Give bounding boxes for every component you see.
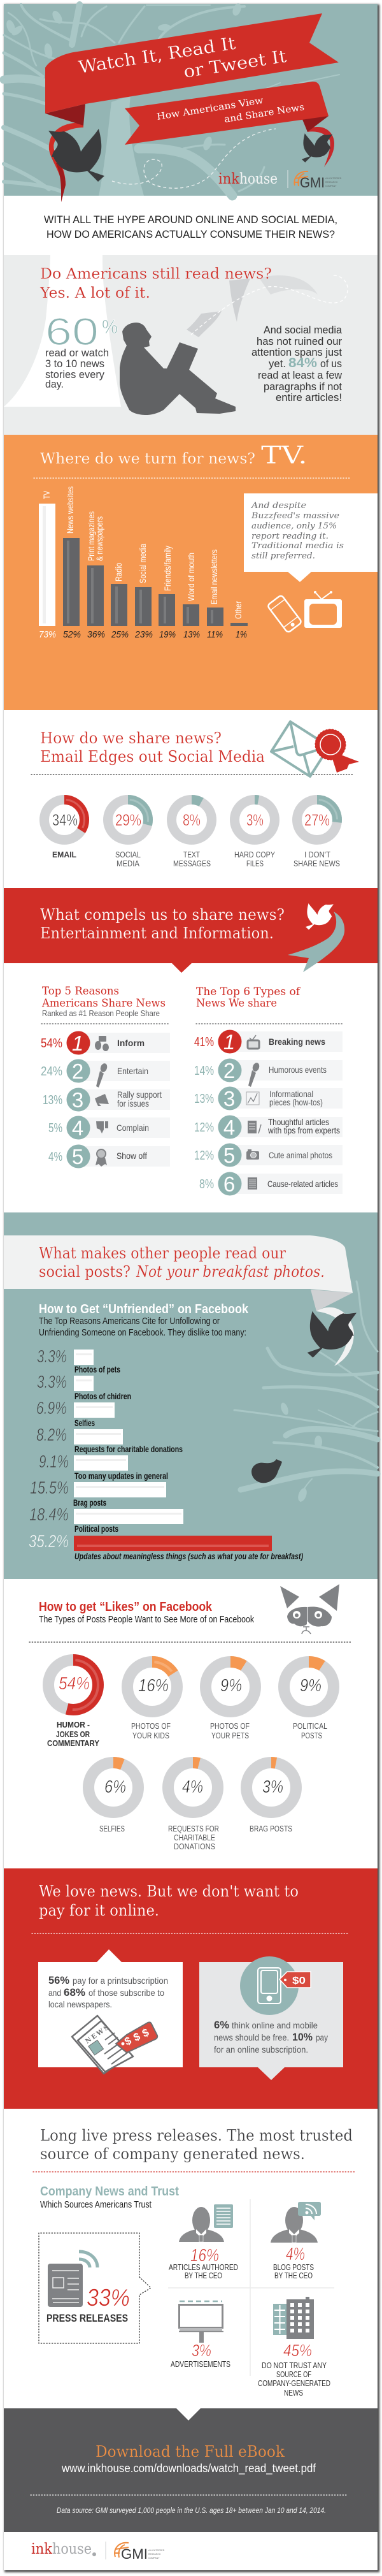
list: reasons to share: 24% (41, 1065, 62, 1079)
white trunk (4, 255, 121, 407)
bar chart: 19% (159, 629, 176, 640)
donut chart: liked posts: COMMENTARY (47, 1738, 99, 1748)
icon: chart (246, 1092, 259, 1105)
stat: articles by CEO (169, 2204, 238, 2280)
icon: reader silhouette (120, 323, 236, 415)
stat: advertisements (171, 2301, 230, 2369)
list: types of news shared: 3 (223, 1087, 235, 1110)
list: reasons to share: Rally support (117, 1089, 162, 1100)
list: types of news shared: Cute animal photos (269, 1151, 332, 1160)
donut chart: share channels: SHARE NEWS (294, 859, 340, 868)
bar chart: Radio (114, 563, 124, 581)
donut chart: liked posts: PHOTOS OF (131, 1721, 171, 1731)
heading: top 5 reasons: Americans Share News (41, 997, 166, 1009)
heading: The Types of Posts People Want to See More of on Facebook (39, 1615, 255, 1625)
donut chart: liked posts: HUMOR - (57, 1720, 90, 1729)
icon: document (248, 1177, 257, 1190)
icon: television (304, 591, 342, 628)
list: reasons to share: 1 (72, 1031, 83, 1055)
list: reasons to share: Complain (117, 1123, 149, 1133)
list: reasons to share: 5% (48, 1121, 62, 1135)
stat: no trust: NEWS (284, 2388, 303, 2398)
bar chart: Email newsletters (209, 549, 219, 604)
stat: blog posts by CEO (271, 2202, 321, 2280)
stat: no trust: 45% (283, 2341, 312, 2360)
donut chart: share channels: 29% (115, 811, 141, 829)
donut chart: liked posts: 54% (59, 1673, 90, 1693)
text: attention spans: yet. (269, 358, 286, 370)
stat: 60 percent: 3 to 10 news (45, 358, 104, 370)
panel: what compels us to share (4, 888, 378, 973)
donut chart: share channels: 34% (52, 811, 78, 829)
heading: top 6 types (196, 986, 301, 1009)
heading: unfriended (39, 1302, 249, 1338)
callout: Buzzfeed: Buzzfeed's massive (251, 511, 339, 521)
heading: unfriended: The Top Reasons Americans Cite for Unfollowing or (39, 1316, 220, 1327)
donut chart: liked posts: POSTS (301, 1731, 322, 1740)
icon: envelope with rosette (271, 722, 359, 776)
icon: megaphone (95, 1094, 109, 1106)
list: reasons to share: 4% (48, 1150, 62, 1164)
donut chart: share channels: SOCIAL (115, 850, 141, 859)
list: types of news shared: 13% (194, 1092, 214, 1106)
list: reasons to share: Entertain (117, 1066, 148, 1076)
bar chart: reasons for unfriending: Requests for charitable donations (74, 1444, 183, 1454)
bar chart: 25% (111, 629, 129, 640)
heading: Long live press releases. The most trusted (40, 2126, 353, 2144)
callout: press releases: PRESS RELEASES (46, 2312, 128, 2324)
donut chart: liked posts: DONATIONS (174, 1842, 215, 1851)
footer logos: GMI (121, 2546, 148, 2562)
heading: Email Edges out Social Media (40, 748, 265, 766)
donut chart: liked posts: REQUESTS FOR (168, 1824, 219, 1833)
logos: ink (218, 171, 240, 187)
panel: header (4, 3, 378, 202)
footer logos: house (52, 2541, 92, 2558)
list: reasons to share: Show off (117, 1151, 147, 1161)
icon: newspaper with price tag: $$$ (123, 2026, 151, 2048)
list: types of news shared: 14% (194, 1064, 214, 1078)
stat: advertisements: 3% (192, 2341, 211, 2360)
subtitle ribbon (125, 82, 329, 145)
bar chart: reasons for unfriending: 9.1% (39, 1452, 69, 1471)
panel: top lists (41, 985, 343, 1196)
text: attention spans: of us (320, 358, 342, 370)
donut chart: liked posts: PHOTOS OF (210, 1721, 250, 1731)
logos (218, 170, 342, 191)
donut chart: liked posts: YOUR KIDS (132, 1731, 169, 1740)
heading: TV. (261, 441, 308, 469)
list: types of news shared: with tips from experts (267, 1126, 340, 1135)
heading: top 6 types: News We share (196, 997, 277, 1009)
icon: small perched bird (251, 1459, 282, 1483)
heading: Do Americans still read news? (40, 265, 272, 282)
heading: unfriended: Unfriending Someone on Facebook. They dislike too many: (39, 1328, 246, 1338)
donut chart: share channels: MESSAGES (173, 859, 211, 868)
intro question: HOW DO AMERICANS ACTUALLY CONSUME THEIR NEWS? (46, 228, 335, 240)
heading (39, 1600, 255, 1625)
bar chart: reasons for unfriending: 3.3% (37, 1372, 67, 1392)
icon: teal panel bird (308, 1311, 357, 1358)
callout: Buzzfeed: report reading it. (251, 532, 329, 541)
icon: article and pen (248, 1121, 261, 1133)
panel: press releases (33, 2126, 355, 2398)
list: types of news shared: 4 (223, 1116, 235, 1139)
text: attention spans: read at least a few (258, 369, 343, 381)
bar chart: Print magazines (87, 511, 96, 561)
card: online subscriptions: for an online subscription. (214, 2044, 308, 2055)
heading: top 5 reasons (41, 985, 166, 1018)
list: reasons to share (41, 1031, 170, 1168)
bar chart: reasons for unfriending (29, 1346, 303, 1561)
stat: articles by CEO: BY THE CEO (185, 2271, 222, 2280)
heading: top 5 reasons: Ranked as #1 Reason People Share (42, 1008, 160, 1018)
bar chart: reasons for unfriending: Too many updates in general (74, 1471, 168, 1481)
icon: white bird (306, 903, 334, 929)
stat: 60 percent: read or watch (45, 347, 109, 359)
main title ribbon: or Tweet It (182, 47, 288, 82)
text: attention spans: attention spans just (251, 346, 342, 358)
list: types of news shared: 1 (223, 1030, 235, 1054)
donut chart: liked posts: 4% (182, 1777, 203, 1796)
bar chart: reasons for unfriending: Brag posts (73, 1497, 106, 1508)
download url: www.inkhouse.com/downloads/watch_read_tweet.pdf (61, 2462, 316, 2475)
bar chart: & newspapers (95, 516, 104, 561)
list: reasons to share: 5 (72, 1145, 83, 1168)
list: types of news shared: Thoughtful articles (268, 1117, 329, 1127)
bar chart: Word of mouth (187, 553, 196, 601)
card: print subscriptions: local newspapers. (48, 1999, 112, 2009)
icon: phone with zero price tag: $0 (292, 1976, 306, 1986)
card: online subscriptions: pay (316, 2032, 328, 2042)
heading: top 5 reasons: Top 5 Reasons (42, 985, 119, 997)
bar chart: 11% (207, 629, 223, 640)
heading: top 6 types: The Top 6 Types of (196, 986, 301, 998)
donut chart: liked posts (46, 1658, 334, 1851)
bar chart: reasons for unfriending: Photos of pets (74, 1364, 120, 1374)
bar chart: reasons for unfriending: 3.3% (37, 1346, 67, 1366)
list: types of news shared: Cause-related articles (267, 1179, 338, 1189)
stat: articles by CEO: 16% (190, 2245, 219, 2265)
panel: how do we share news (31, 722, 359, 868)
heading: source of company generated news. (40, 2144, 305, 2163)
icon: thumbs down (96, 1121, 108, 1133)
donut chart: share channels (43, 798, 340, 868)
list: types of news shared: 12% (194, 1121, 214, 1135)
data source note: Data source: GMI surveyed 1,000 people in the U.S. ages 18+ between Jan 10 and 14, 2014. (57, 2506, 326, 2515)
text: attention spans: And social media (264, 324, 343, 336)
bar chart: 1% (236, 629, 247, 640)
icon: camera (246, 1149, 259, 1160)
donut chart: liked posts: 16% (138, 1675, 169, 1695)
card: print subscriptions (38, 1949, 183, 2074)
icon: tv (248, 1035, 259, 1049)
icon: newspaper with price tag: NEWS (84, 2024, 110, 2045)
text: attention spans: has not ruined our (257, 335, 342, 347)
stat: advertisements: ADVERTISEMENTS (171, 2359, 230, 2369)
card: online subscriptions: news should be free. (214, 2032, 289, 2042)
subheading: Company News and Trust (40, 2185, 179, 2199)
callout: Buzzfeed: Traditional media is (251, 541, 344, 551)
bar chart: reasons for unfriending: Photos of chidren (74, 1391, 131, 1401)
stat: articles by CEO: ARTICLES AUTHORED (169, 2262, 238, 2272)
footer logos: COMPANY (148, 2557, 160, 2559)
donut chart: share channels: HARD COPY (234, 850, 275, 859)
bar chart: reasons for unfriending: Updates about meaningless things (such as what you ate for breakfast) (74, 1551, 303, 1561)
donut chart: liked posts: 9% (220, 1675, 242, 1695)
flight path (112, 129, 276, 188)
list: types of news shared: 12% (194, 1149, 214, 1163)
icon: large bird (48, 129, 104, 182)
subheading (40, 2185, 179, 2210)
panel: pay for news online (4, 1868, 378, 2109)
flying pages (187, 275, 318, 337)
stat: no trust: COMPANY-GENERATED (258, 2378, 330, 2388)
list: types of news shared: 2 (223, 1059, 235, 1082)
heading: Download the Full eBook (96, 2442, 285, 2461)
donut chart: liked posts: BRAG POSTS (250, 1824, 292, 1833)
footer logos (31, 2541, 165, 2562)
card: print subscriptions: of those subscribe to (88, 1988, 164, 1998)
icon: small bird (302, 133, 332, 163)
bar chart: 23% (134, 629, 153, 640)
heading: pay for it online. (39, 1901, 159, 1919)
list: types of news shared (194, 1030, 343, 1196)
white banner ribbon (4, 1235, 354, 1366)
heading: How do we share news? (40, 729, 222, 747)
bar chart: Friends/family (163, 546, 173, 591)
list: types of news shared: pieces (how-tos) (269, 1098, 323, 1107)
list: reasons to share: 13% (43, 1093, 62, 1107)
list: types of news shared: Humorous events (269, 1065, 327, 1075)
heading (40, 729, 265, 766)
bar chart (39, 486, 248, 640)
bar chart: TV (42, 491, 52, 499)
donut chart: liked posts: 9% (300, 1675, 322, 1695)
bar chart: 73% (39, 629, 56, 640)
card: print subscriptions: pay for a printsubscription (73, 1976, 168, 1986)
stat: blog posts by CEO: 4% (286, 2244, 305, 2264)
bar chart: News websites (66, 486, 75, 534)
callout: press releases (39, 2233, 151, 2343)
icon: newspaper with price tag (72, 2016, 157, 2074)
heading (40, 2126, 353, 2163)
donut chart: liked posts: SELFIES (99, 1824, 125, 1833)
bar chart: reasons for unfriending: 18.4% (29, 1504, 69, 1524)
logos: A LIGHTSPEED (325, 177, 342, 180)
tree branches (234, 1281, 378, 1501)
main title ribbon (45, 13, 339, 126)
donut chart: share channels: 27% (304, 811, 330, 829)
bar chart: reasons for unfriending: 6.9% (36, 1398, 67, 1418)
logos: house (239, 171, 278, 187)
logos: GMI (300, 175, 325, 191)
subtitle ribbon: How Americans View (156, 96, 264, 122)
donut chart: share channels: 8% (183, 811, 201, 829)
text: attention spans (251, 324, 343, 404)
donut chart: liked posts: 3% (262, 1777, 283, 1796)
card: print subscriptions: 68% (64, 1986, 85, 1998)
logos: RESEARCH (325, 181, 338, 184)
intro question (44, 214, 337, 240)
bar chart: reasons for unfriending: 8.2% (36, 1425, 67, 1444)
list: reasons to share: 2 (72, 1059, 83, 1083)
text: attention spans: entire articles! (276, 391, 342, 404)
bar chart: 52% (63, 629, 81, 640)
donut chart: liked posts: POLITICAL (293, 1721, 327, 1731)
list: reasons to share: 4 (72, 1116, 83, 1140)
callout: press releases: 33% (87, 2285, 130, 2311)
stat: 60 percent: 60 (45, 310, 99, 353)
heading: What makes other people read our (39, 1244, 286, 1262)
donut chart: share channels: TEXT (183, 850, 200, 859)
card: online subscriptions: 6% (214, 2019, 229, 2031)
icon: phone (267, 595, 302, 633)
card: print subscriptions: and (48, 1988, 61, 1998)
heading (40, 441, 308, 469)
heading (39, 1882, 299, 1919)
stat: 60 percent: stories every (45, 368, 104, 381)
heading (40, 905, 285, 942)
list: types of news shared: 41% (194, 1035, 214, 1049)
footer logos: RESEARCH (148, 2553, 161, 2556)
stat: blog posts by CEO: BLOG POSTS (273, 2262, 314, 2272)
icon: grumpy cat (280, 1584, 339, 1634)
card: online subscriptions: 10% (292, 2031, 313, 2043)
main title ribbon: Watch It, Read It (77, 34, 237, 78)
heading: Where do we turn for news? (40, 449, 255, 467)
icon: award ribbon (96, 1149, 107, 1167)
panel: do Americans still read news (4, 255, 378, 435)
heading: unfriended: How to Get “Unfriended” on Facebook (39, 1302, 249, 1316)
tree background (4, 4, 339, 196)
bar chart: reasons for unfriending: Selfies (74, 1418, 95, 1428)
list: reasons to share: 3 (72, 1088, 83, 1112)
donut chart: liked posts: JOKES OR (56, 1729, 90, 1739)
icon: phone with zero price tag (240, 1956, 311, 2015)
stat: 60 percent: % (102, 316, 118, 338)
panel: what makes others read (4, 1212, 378, 1579)
bar chart: 36% (87, 629, 105, 640)
panel: do Americans still read news: Yes. A lot of it. (39, 284, 150, 302)
callout: Buzzfeed: And despite (251, 501, 306, 511)
icon: speech bubbles (95, 1036, 109, 1051)
card: print subscriptions: 56% (48, 1974, 69, 1986)
donut chart: share channels: I DON'T (304, 850, 330, 859)
footer logos: ink (31, 2541, 53, 2558)
donut chart: share channels: FILES (246, 859, 264, 868)
stat: blog posts by CEO: BY THE CEO (274, 2271, 313, 2280)
list: reasons to share: Inform (117, 1038, 145, 1048)
red ribbon tails (49, 123, 334, 202)
icon: microphone (96, 1063, 108, 1088)
intro question: WITH ALL THE HYPE AROUND ONLINE AND SOCIAL MEDIA, (44, 214, 337, 226)
panel: how to get likes (29, 1584, 351, 1851)
heading: Entertainment and Information. (40, 924, 274, 942)
donut chart: share channels: EMAIL (52, 850, 76, 859)
donut chart: liked posts: 6% (104, 1777, 126, 1796)
donut chart: share channels: MEDIA (117, 859, 139, 868)
stat: no trust (258, 2297, 330, 2398)
text: attention spans: 84% (288, 356, 317, 370)
list: reasons to share: for issues (117, 1098, 149, 1109)
stat: 60 percent (45, 310, 118, 390)
bar chart: reasons for unfriending: 15.5% (30, 1478, 69, 1497)
list: types of news shared: 5 (223, 1144, 235, 1167)
donut chart: liked posts: YOUR PETS (211, 1731, 249, 1740)
bar chart: 13% (183, 629, 200, 640)
list: types of news shared: 6 (223, 1172, 235, 1196)
bar chart: Social media (138, 544, 148, 583)
logos: COMPANY (325, 185, 337, 187)
stat: no trust: DO NOT TRUST ANY (262, 2361, 327, 2370)
subheading: Which Sources Americans Trust (40, 2200, 152, 2210)
stat: 60 percent: day. (45, 378, 64, 390)
panel: where do we turn for news (4, 435, 378, 710)
bar chart: reasons for unfriending: Political posts (74, 1524, 118, 1534)
heading: What compels us to share news? (40, 905, 285, 924)
white banner ribbon: social posts? (39, 1262, 131, 1281)
donut chart: share channels: 3% (246, 811, 264, 829)
callout: Buzzfeed: audience, only 15% (251, 521, 337, 531)
footer logos: A LIGHTSPEED (148, 2549, 165, 2552)
icon: teal swoosh (288, 912, 344, 972)
white banner ribbon: Not your breakfast photos. (136, 1262, 325, 1281)
bar chart: Other (234, 601, 243, 619)
stat: no trust: SOURCE OF (276, 2369, 311, 2379)
callout: Buzzfeed: still preferred. (251, 551, 315, 561)
heading: How to get “Likes” on Facebook (39, 1600, 213, 1614)
list: types of news shared: 8% (199, 1177, 214, 1191)
list: reasons to share: 54% (41, 1037, 62, 1051)
icon: mic (248, 1062, 260, 1087)
card: online subscriptions (199, 1956, 343, 2080)
bar chart: reasons for unfriending: 35.2% (29, 1531, 69, 1551)
text: attention spans: paragraphs if not (264, 381, 342, 393)
heading: We love news. But we don't want to (39, 1882, 299, 1900)
list: types of news shared: Informational (269, 1089, 313, 1099)
callout: Buzzfeed (244, 493, 378, 582)
panel: download (4, 2408, 378, 2532)
donut chart: liked posts: CHARITABLE (174, 1833, 215, 1842)
subtitle ribbon: and Share News (223, 102, 305, 125)
list: types of news shared: Breaking news (269, 1037, 325, 1047)
card: online subscriptions: think online and mobile (232, 2020, 318, 2030)
